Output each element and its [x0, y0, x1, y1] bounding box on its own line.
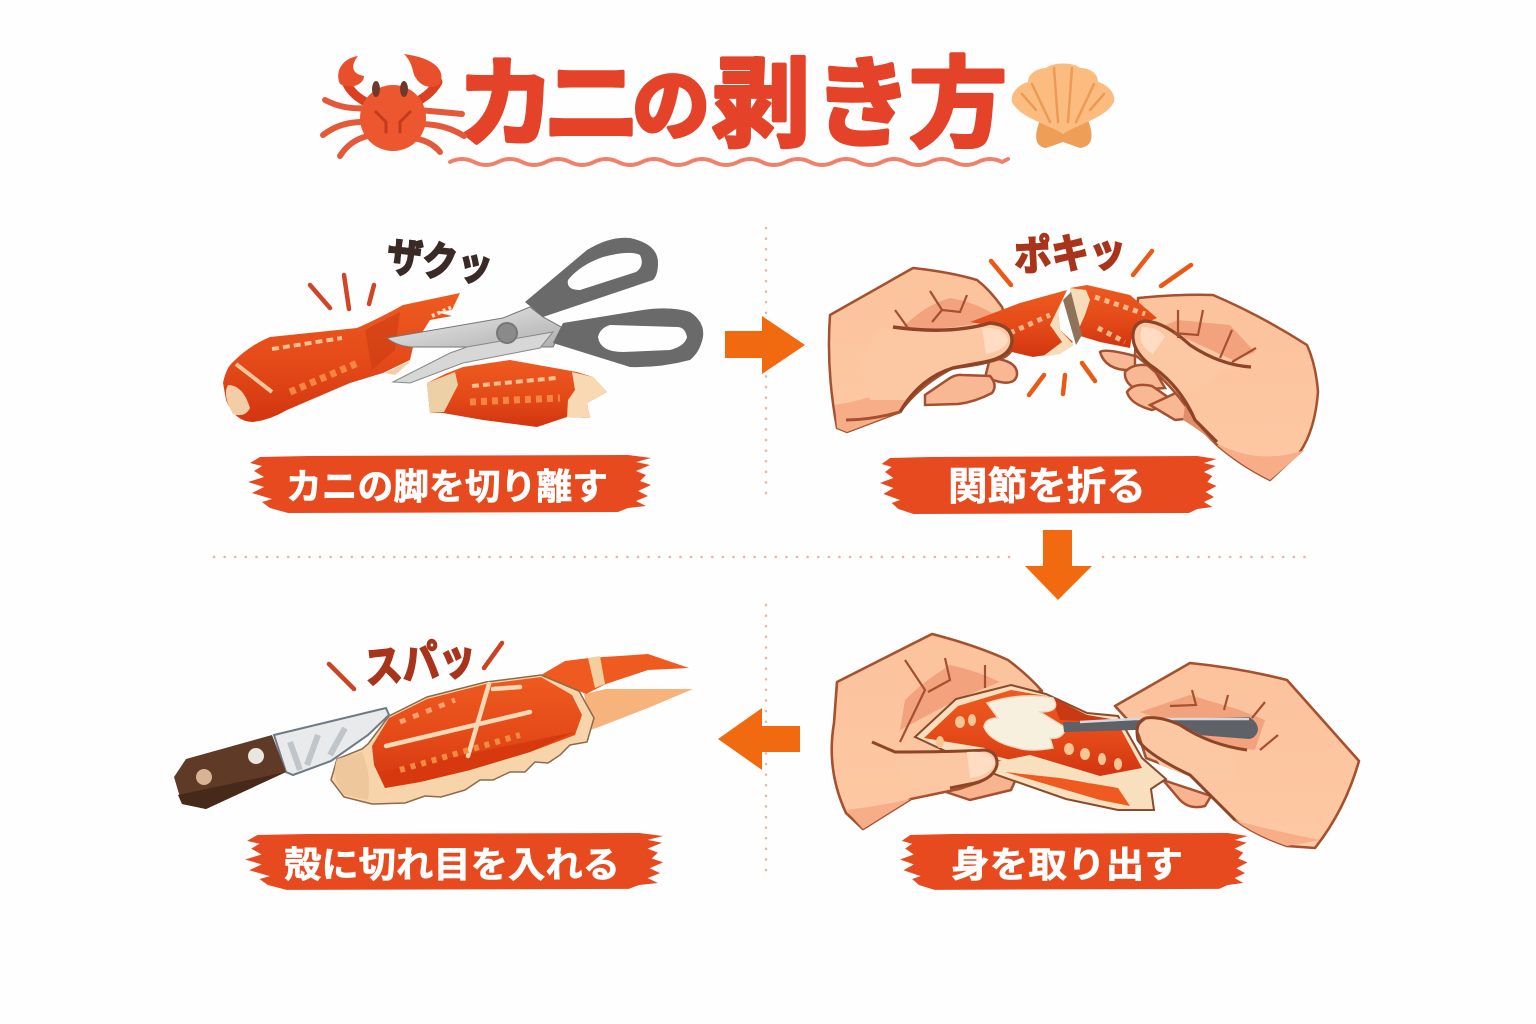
dividers: [214, 228, 1308, 880]
banner: step 2 label: 関節を折る: [948, 466, 1146, 509]
sound effect: pokih: ポキッ: [1013, 228, 1127, 280]
title: き: [814, 49, 912, 159]
arrow 2: down: [1025, 530, 1092, 600]
impact lines: [991, 251, 1191, 395]
banner: step 1 label: カニの脚を切り離す: [286, 466, 608, 507]
right hand back fingers: [1100, 351, 1195, 420]
left hand back fingers: [940, 765, 1020, 800]
arrow 1: right: [725, 316, 805, 374]
right thumb: [1133, 321, 1251, 442]
banner: step 1 label: [248, 455, 651, 513]
knife: [174, 708, 389, 809]
palm creases: [895, 291, 967, 328]
title: カ: [457, 49, 555, 159]
arrow 3: left: [718, 708, 800, 770]
crab meat: [984, 696, 1066, 750]
left thumb: [846, 323, 1012, 420]
right hand: [1115, 663, 1359, 848]
icon: crab: [323, 54, 464, 156]
left hand: [829, 268, 1013, 432]
crab leg right piece: [427, 360, 607, 427]
title: の: [632, 62, 710, 150]
banner: step 4 label: 殻に切れ目を入れる: [284, 844, 620, 885]
banner: step 3 label: [900, 833, 1248, 890]
step 1: cutting the leg with scissors: [223, 234, 703, 427]
impact lines: [310, 275, 374, 309]
step 2: breaking the joint: [829, 228, 1318, 480]
step 4: slicing the shell with a knife: [174, 633, 693, 809]
broken crab leg: [970, 285, 1157, 357]
thumbs: [895, 750, 997, 788]
wavy underline: [450, 159, 1008, 165]
step 3: removing the meat: [832, 634, 1359, 848]
opened crab shell: [915, 685, 1166, 810]
right hand back fingers: [1163, 780, 1211, 807]
banner: step 3 label: 身を取り出す: [951, 844, 1183, 885]
impact lines: [329, 643, 502, 689]
crab claw: [331, 654, 693, 804]
scissors: [387, 238, 703, 383]
left hand back fingers: [925, 358, 1017, 405]
spoon: [1063, 717, 1258, 739]
title: ニ: [543, 49, 641, 159]
sound effect: zakuh: ザクッ: [385, 234, 495, 290]
banner: step 2 label: [880, 456, 1217, 514]
icon: scallop shell: [1012, 64, 1114, 148]
banner: step 4 label: [245, 833, 663, 890]
title: 方: [909, 49, 1007, 159]
right hand: [1135, 295, 1318, 480]
sound effect: supah: スパッ: [362, 633, 479, 694]
crab leg left: [223, 293, 460, 422]
left hand: [832, 634, 1042, 829]
title: 剥: [712, 49, 810, 159]
